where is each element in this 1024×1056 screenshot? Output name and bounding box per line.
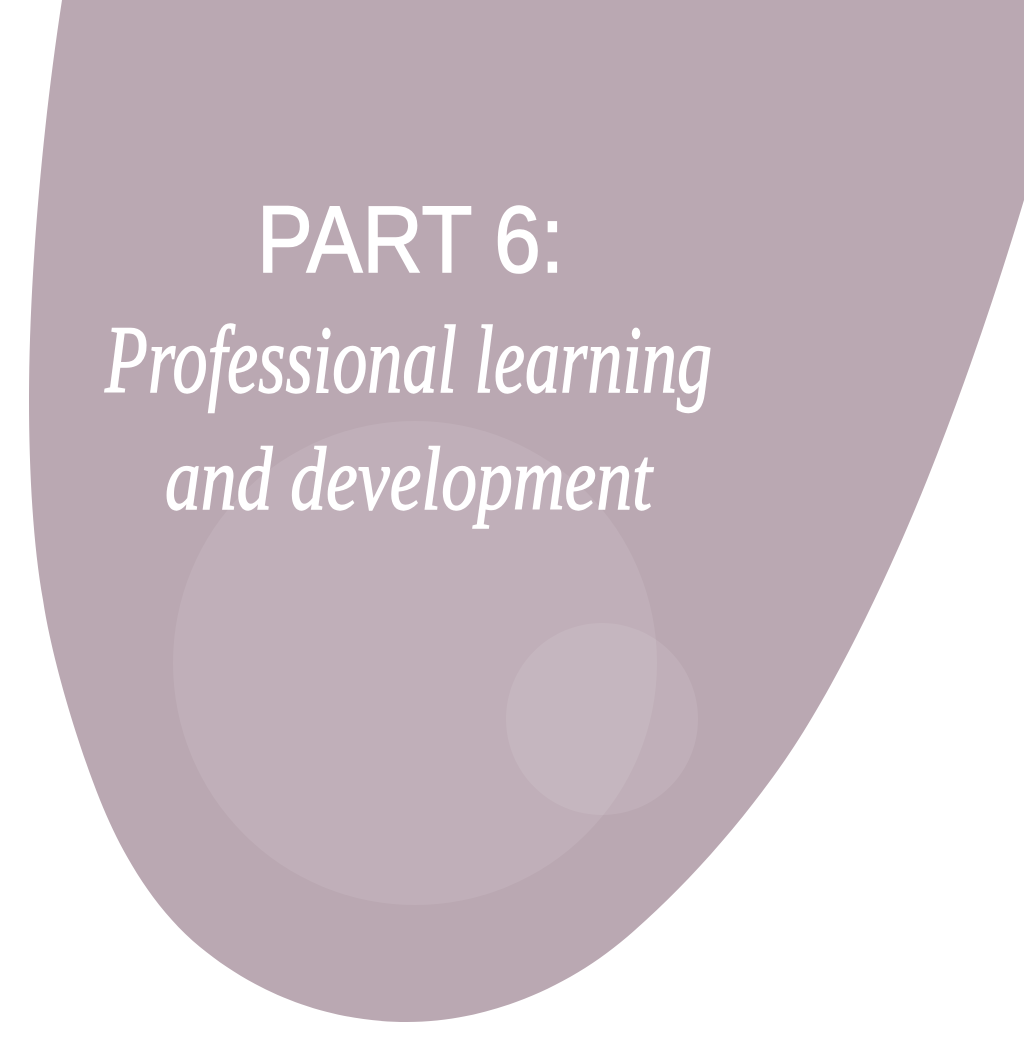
title line 2: and development bbox=[165, 430, 654, 529]
title line 1: Professional learning bbox=[104, 306, 712, 413]
heading: part number: PART 6: bbox=[257, 187, 564, 293]
small decorative circle bbox=[506, 623, 698, 815]
large decorative circle bbox=[173, 421, 657, 905]
title: topic bbox=[104, 306, 712, 529]
